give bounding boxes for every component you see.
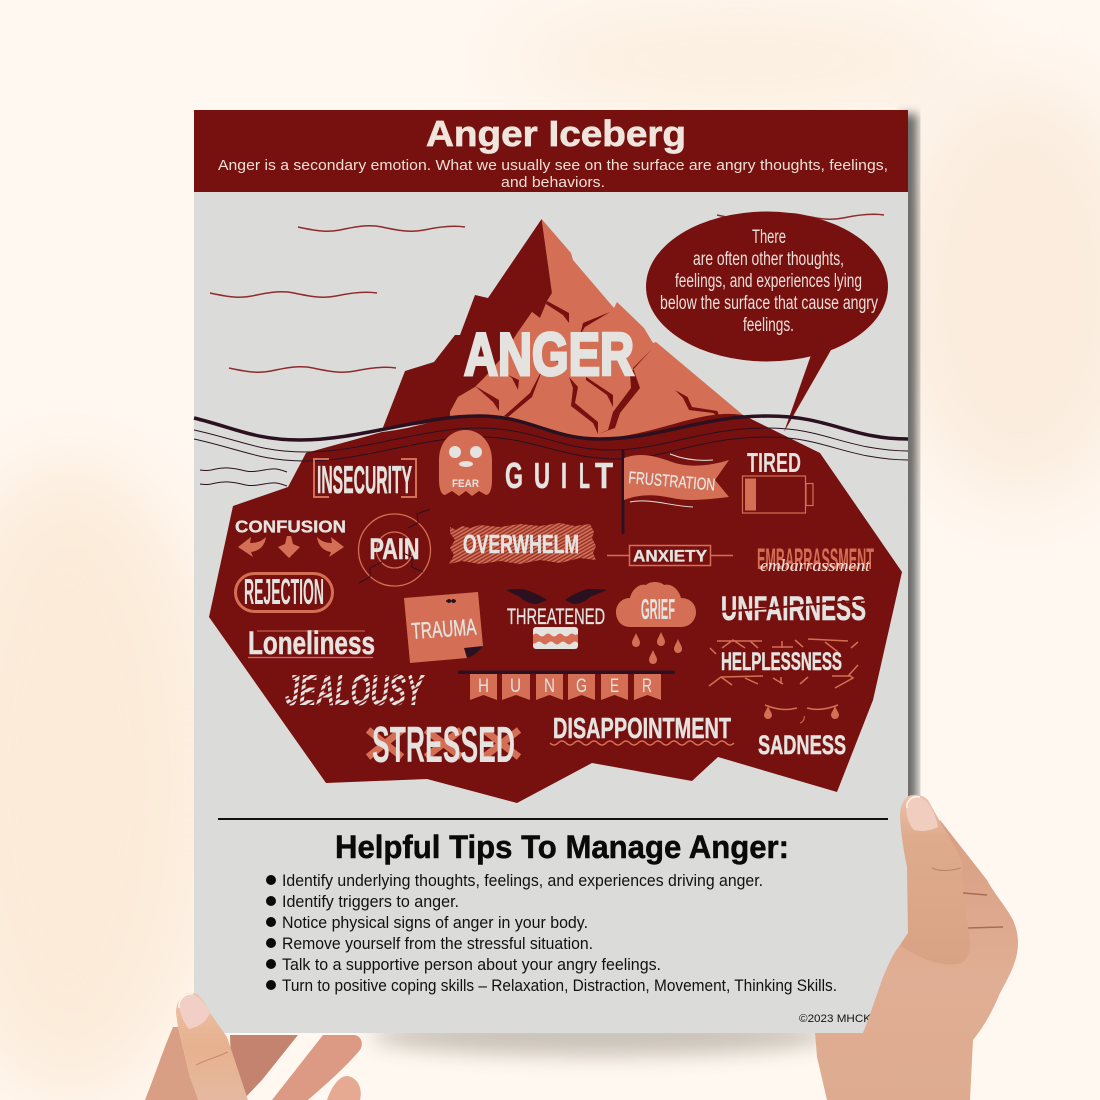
word: unfairness: [718, 590, 868, 628]
word: insecurity: [314, 459, 416, 502]
tips heading: Helpful Tips To Manage Anger:: [335, 829, 789, 865]
word: rejection pill: [236, 571, 332, 612]
word: helplessness with sticks: HELPLESSNESS: [721, 648, 842, 676]
left hand holding paper: [145, 993, 362, 1100]
submerged iceberg: [209, 414, 902, 803]
tips list: Identify triggers to anger.: [282, 892, 459, 911]
icon: grief cloud: GRIEF: [641, 594, 675, 626]
word: loneliness: Loneliness: [248, 625, 375, 661]
banner: hunger: E: [610, 676, 619, 697]
word: sadness with face: SADNESS: [758, 730, 846, 760]
word: guilt: [505, 455, 613, 496]
subtitle: [218, 157, 888, 191]
dark face of the mountain: [382, 219, 552, 430]
header banner: [194, 110, 908, 192]
text: REJECTION: [244, 571, 324, 612]
icon: grief cloud: [616, 582, 696, 664]
word: guilt: L: [579, 455, 590, 496]
speech bubble: [646, 212, 888, 432]
icon: fear ghost: FEAR: [452, 478, 479, 490]
word: pain in target: [358, 509, 430, 586]
word: overwhelm scribble: [449, 523, 596, 564]
word: threatened face: [506, 589, 607, 649]
sticky note: trauma: [404, 592, 483, 663]
bubble text: [660, 227, 878, 336]
ANGER label: ANGER: [464, 321, 634, 388]
word: guilt: G: [505, 455, 523, 496]
word: embarrassment: embarrassment: [760, 556, 871, 575]
flag: frustration: [622, 449, 729, 534]
banner: hunger: R: [642, 676, 652, 697]
tips list: Turn to positive coping skills – Relaxation, Distraction, Movement, Thinking Skills.: [282, 976, 837, 995]
word: unfairness: UNFAIRNESS: [721, 590, 866, 628]
text: EMBARRASSMENT: [757, 543, 874, 576]
banner: hunger: [458, 670, 675, 700]
sticky note: trauma: TRAUMA: [411, 613, 478, 644]
banner: hunger: N: [544, 676, 555, 697]
word: sadness with face: [758, 705, 846, 760]
word: disappointment: [550, 713, 734, 745]
word: confusion with arrows: [235, 516, 346, 558]
bubble text: feelings, and experiences lying: [675, 271, 862, 292]
tips list: [266, 871, 837, 995]
word: tired with battery: TIRED: [747, 447, 801, 478]
right hand holding paper: [815, 795, 1018, 1100]
word: threatened face: THREATENED: [507, 604, 605, 629]
tips list: Talk to a supportive person about your angry feelings.: [282, 955, 661, 974]
paper: [194, 110, 908, 1033]
subtitle: Anger is a secondary emotion. What we usually see on the surface are angry thoughts, feelings,: [218, 157, 888, 174]
word: embarrassment: [757, 543, 874, 576]
bubble text: feelings.: [743, 315, 794, 336]
iceberg tip: [382, 219, 760, 440]
tips list: Identify underlying thoughts, feelings, and experiences driving anger.: [282, 871, 763, 890]
word: confusion with arrows: CONFUSION: [235, 516, 346, 536]
word: disappointment: DISAPPOINTMENT: [553, 713, 731, 745]
word: jealousy: JEALOUSY: [285, 666, 425, 715]
subtitle: and behaviors.: [501, 174, 605, 191]
word: guilt: T: [595, 455, 613, 496]
divider rule: [218, 818, 888, 820]
tips list: Remove yourself from the stressful situation.: [282, 934, 593, 953]
word: pain in target: PAIN: [370, 533, 420, 566]
word: helplessness with sticks: [709, 639, 858, 688]
bubble text: are often other thoughts,: [693, 249, 844, 270]
paper shadow: [370, 114, 917, 1056]
copyright: ©2023 MHCK: [799, 1013, 872, 1025]
water lines: [194, 416, 908, 486]
flag: frustration: FRUSTRATION: [628, 468, 716, 495]
light face of the mountain: [440, 219, 760, 440]
sky wave lines: [210, 214, 884, 372]
word: tired with battery: [742, 447, 813, 513]
bubble text: below the surface that cause angry: [660, 293, 878, 314]
banner: hunger: G: [576, 676, 587, 697]
icon: fear ghost: [439, 430, 492, 496]
cracks: [475, 301, 720, 434]
title: Anger Iceberg: [426, 113, 686, 154]
banner: hunger: H: [478, 676, 489, 697]
text: INSECURITY: [317, 459, 412, 502]
word: stressed with crosses: [368, 716, 519, 773]
banner: hunger: U: [510, 676, 521, 697]
word: guilt: U: [534, 455, 550, 496]
bubble text: There: [752, 227, 786, 248]
word: guilt: I: [561, 455, 567, 496]
word: overwhelm scribble: OVERWHELM: [463, 529, 579, 559]
word: anxiety: ANXIETY: [633, 548, 707, 566]
word: stressed with crosses: STRESSED: [372, 716, 515, 773]
tips list: Notice physical signs of anger in your body.: [282, 913, 588, 932]
word: anxiety: [607, 546, 733, 566]
